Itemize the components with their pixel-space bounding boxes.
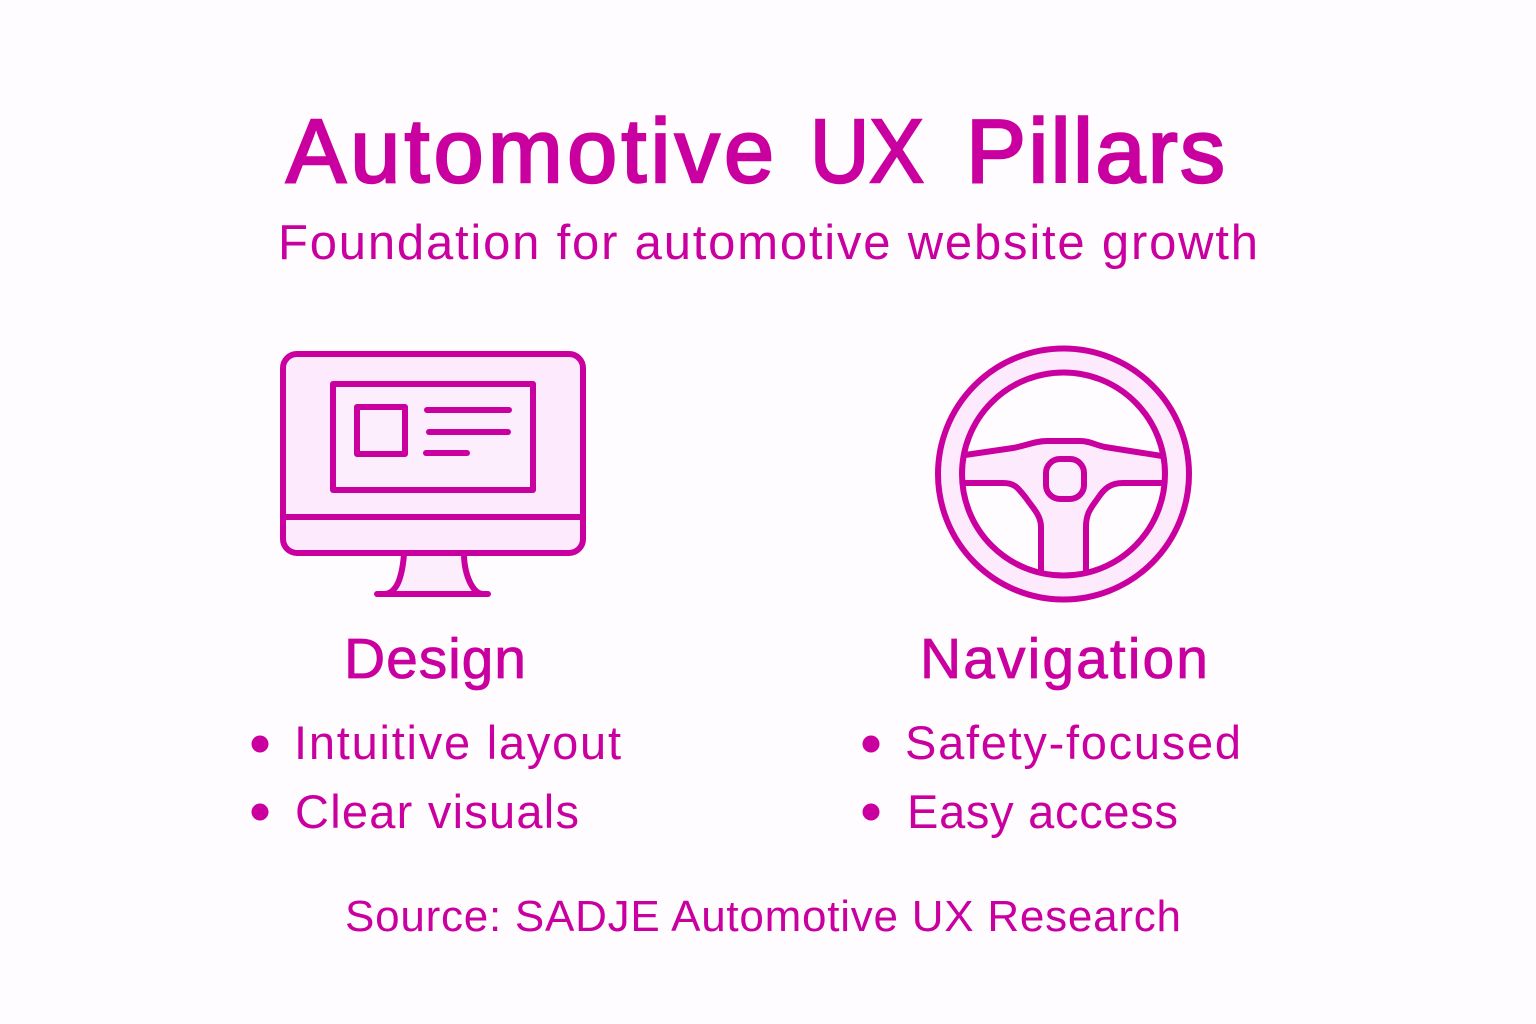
source note: Source: SADJE Automotive UX Research (345, 892, 1181, 941)
list: Design points: Clear visuals (295, 785, 579, 838)
icon: steering wheel (938, 348, 1189, 600)
title: Automotive (286, 102, 774, 202)
subtitle: Foundation for automotive website growth (278, 216, 1258, 270)
list: Design points (252, 716, 621, 838)
list: Navigation points (862, 716, 1241, 838)
icon: desktop monitor (283, 354, 583, 594)
list: Design points: Intuitive layout (294, 716, 621, 769)
title: UX (810, 102, 924, 202)
list: Navigation points: Safety-focused (905, 716, 1241, 769)
title (286, 102, 1225, 202)
list: Navigation points: Easy access (907, 785, 1178, 838)
title: Pillars (966, 102, 1225, 202)
heading: Navigation: Navigation (920, 627, 1208, 691)
heading: Design: Design (344, 627, 526, 691)
